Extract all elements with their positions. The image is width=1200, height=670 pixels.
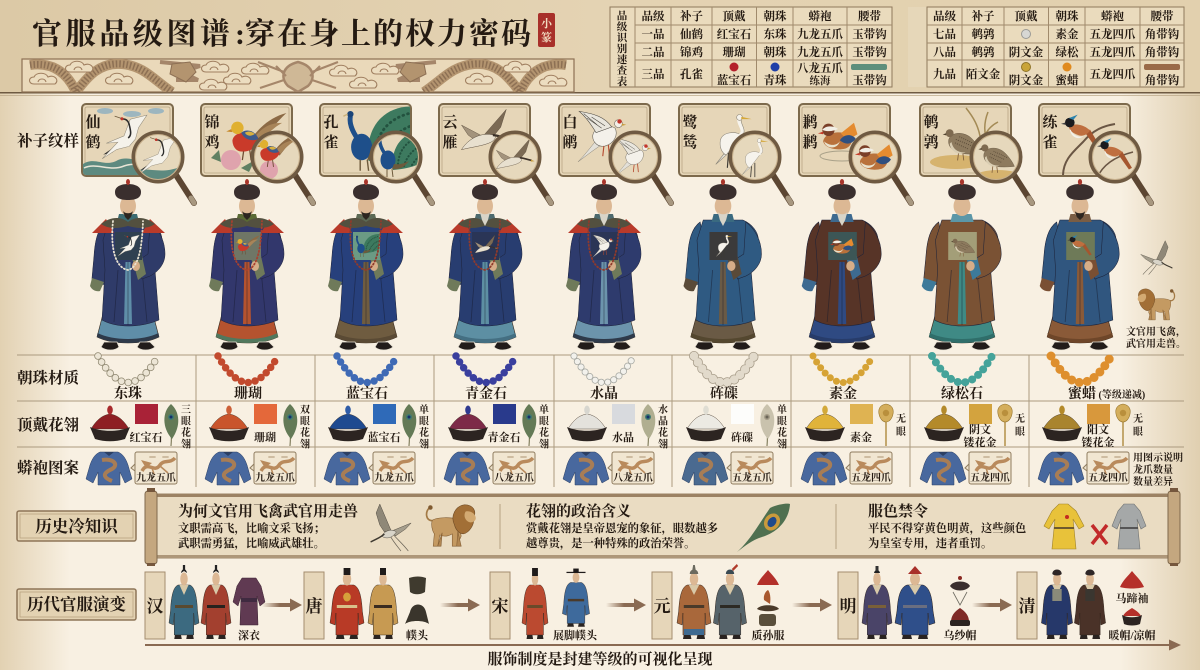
cap set: 珊瑚: 翎: [300, 438, 310, 450]
row heading: 顶戴花翎: 顶戴花翎: [17, 415, 79, 434]
garment: 深衣: 深衣: [238, 628, 260, 642]
note on dragon claws: 龙爪数量: [1133, 463, 1173, 476]
rank badge panel: mandarin duck: 鹣: [802, 133, 818, 151]
rank quick-reference table: ranks 1-3: 珊瑚: [722, 45, 746, 59]
cap set: 素金: 素金: [850, 430, 872, 444]
rank badge panel: wild goose: [439, 104, 530, 176]
rank quick-reference table: ranks 1-3: 速: [617, 53, 628, 66]
silver knob icon: [1022, 30, 1030, 38]
rank quick-reference table: ranks 7-9: 五龙四爪: [1090, 45, 1136, 59]
cap set: 阳文镂花金: 无: [1133, 414, 1143, 425]
rank quick-reference table: ranks 1-3: 蟒袍: [808, 9, 832, 23]
rank quick-reference table: ranks 1-3: 补子: [680, 9, 703, 23]
robe: 五龙四爪 (1): 五龙四爪: [851, 471, 891, 484]
rank quick-reference table: ranks 1-3: 蓝宝石: [717, 73, 752, 87]
cap set: 阳文镂花金: 镂花金: [1082, 435, 1114, 449]
official: rank 2: [209, 179, 284, 350]
rank quick-reference table: ranks 1-3: 玉带钩: [852, 73, 887, 87]
figure: Ming blue: [895, 566, 935, 639]
cap set: 青金石: 单: [539, 405, 549, 416]
rank quick-reference table: ranks 7-9: 绿松: [1056, 45, 1080, 59]
rank badge panel: wild goose: 云: [442, 114, 458, 131]
cap set: 珊瑚: 双: [300, 405, 310, 416]
plaque: 汉: 汉: [146, 597, 164, 616]
rank quick-reference table: ranks 1-3: 品级: [642, 9, 665, 23]
hats: 马蹄袖 and 暖帽/凉帽: 暖帽/凉帽: [1108, 628, 1156, 642]
trivia 2: feather meaning: 花翎的政治含义: [526, 502, 631, 520]
rank badge panel: quail: 鹑: [923, 134, 939, 151]
rank badge panel: silver pheasant: [559, 104, 650, 176]
rank quick-reference table: ranks 7-9: 阴文金: [1009, 73, 1044, 87]
rank quick-reference table: ranks 7-9: 角带钩: [1145, 27, 1180, 41]
robe: 五龙四爪 (1): [801, 452, 892, 485]
beads: 水晶: [574, 356, 634, 402]
timeline: Ming: [838, 566, 1012, 642]
rank quick-reference table: ranks 7-9: 蜜蜡: [1056, 73, 1079, 87]
magnifier: quail: [972, 132, 1032, 203]
plaque: 汉: [145, 572, 165, 639]
cap set: 水晶: [567, 403, 668, 450]
cap set: 珊瑚: 花: [300, 426, 310, 439]
cap set: 阳文镂花金: 眼: [1133, 426, 1143, 438]
cap set: 青金石: 翎: [539, 438, 549, 450]
rank quick-reference table: ranks 1-3: 腰带: [858, 9, 881, 23]
rank badge panel: quail: 鹌: [923, 113, 939, 131]
cap set: 素金: 无: [896, 414, 906, 425]
title: 官服品级图谱: [32, 18, 234, 51]
robe: 九龙五爪 (1): [86, 452, 177, 485]
beads: 蜜蜡: 蜜蜡 (等级递减): [1068, 385, 1145, 402]
cap set: 砗磲: 砗磲: [731, 430, 753, 444]
cap set: 素金: [805, 404, 906, 446]
trivia 1: birds and beasts: 为何文官用飞禽武官用走兽: [178, 502, 358, 520]
horn belt icon: [1144, 64, 1180, 70]
rank badge panel: silver pheasant: 鹇: [562, 134, 578, 151]
robe: 九龙五爪 (2): [205, 452, 296, 485]
rank badge panel: paradise flycatcher: [1039, 104, 1130, 176]
side note: birds and beasts: 武官用走兽。: [1126, 337, 1186, 350]
figure: Song red: [522, 568, 548, 639]
rank quick-reference table: ranks 1-3: 锦鸡: [680, 45, 703, 59]
plaque: 清: 清: [1018, 596, 1036, 616]
seal: 小篆: 小: [541, 17, 553, 30]
rank badge panel: silver pheasant: 白: [562, 113, 578, 131]
rank quick-reference table: ranks 1-3: 表: [617, 75, 628, 88]
arrow: Yuan to Ming: [792, 598, 832, 612]
note on dragon claws: 数量差异: [1133, 475, 1173, 488]
beads: 东珠: 东珠: [114, 385, 142, 402]
rank quick-reference table: ranks 7-9: 五龙四爪: [1090, 67, 1136, 81]
cap set: 水晶: 晶: [658, 414, 668, 428]
arrow: Han to Tang: [262, 598, 302, 612]
trivia 1: birds and beasts: 武职需勇猛，比喻威武雄壮。: [178, 536, 325, 550]
robe: 九龙五爪 (3): 九龙五爪: [374, 471, 414, 484]
hats: 乌纱帽: [944, 576, 976, 642]
cap set: 水晶: 花: [658, 426, 668, 439]
beads: 东珠: [98, 356, 158, 402]
magnifier: golden pheasant: [252, 132, 313, 203]
rank badge panel: peacock: 雀: [323, 133, 339, 151]
label button: 历史冷知识: [17, 511, 136, 541]
plaque: 唐: 唐: [306, 596, 322, 616]
robe: 九龙五爪 (1): 九龙五爪: [136, 471, 176, 484]
rank badge panel: paradise flycatcher: 练: [1042, 113, 1059, 131]
row heading: 蟒袍图案: 蟒袍图案: [17, 458, 80, 477]
cap set: 红宝石: 三: [181, 405, 191, 416]
cap set: 红宝石: 红宝石: [130, 431, 162, 444]
rank badge panel: golden pheasant: 鸡: [204, 134, 220, 151]
cap set: 蓝宝石: 翎: [419, 438, 429, 450]
rank quick-reference table: ranks 1-3: 查: [617, 64, 628, 77]
beads: 砗磲: 砗磲: [710, 385, 738, 402]
right scroll roller: [1168, 488, 1180, 566]
beads: 素金: [813, 356, 873, 402]
side note: birds and beasts: 文官用飞禽，: [1126, 325, 1186, 338]
cap set: 阴文镂花金: 无: [1015, 414, 1025, 425]
cap set: 砗磲: 翎: [777, 438, 787, 450]
hats: 乌纱帽: 乌纱帽: [944, 628, 976, 642]
trivia 3: colour ban: 平民不得穿黄色明黄，这些颜色: [868, 521, 1026, 535]
beads: 蓝宝石: 蓝宝石: [346, 385, 388, 402]
beads: 青金石: 青金石: [465, 385, 507, 402]
plaque: 明: [838, 572, 858, 639]
figure: Qing brown: [1074, 570, 1106, 639]
arrow: Song to Yuan: [606, 598, 646, 612]
beads: 绿松石: 绿松石: [941, 385, 983, 402]
gold knob icon: [1022, 62, 1030, 72]
cap set: 水晶: 水晶: [612, 430, 634, 444]
cap set: 阳文镂花金: [1042, 404, 1143, 449]
rank quick-reference table: ranks 1-3: 仙鹤: [680, 27, 703, 41]
cap set: 蓝宝石: 蓝宝石: [368, 430, 400, 444]
title: :: [235, 18, 249, 51]
cap set: 蓝宝石: [328, 403, 429, 450]
rank quick-reference table: ranks 1-3: 红宝石: [717, 28, 752, 41]
cap set: 砗磲: 眼: [777, 416, 787, 428]
cap set: 水晶: 水: [658, 405, 668, 416]
magnifier: paradise flycatcher: [1090, 132, 1151, 203]
figure: Qing navy: [1041, 570, 1073, 639]
rank quick-reference table: ranks 1-3: 朝珠: [764, 45, 787, 59]
cap set: 青金石: 花: [539, 426, 549, 439]
label button: 历代官服演变: [17, 589, 136, 620]
rank badge panel: crane: 鹤: [85, 133, 101, 151]
robe: 九龙五爪 (3): [324, 452, 415, 485]
magnifier: silver pheasant: [610, 132, 671, 203]
rank quick-reference table: ranks 7-9: 角带钩: [1145, 73, 1180, 87]
cap set: 青金石: 眼: [539, 416, 549, 428]
robe: 九龙五爪 (2): 九龙五爪: [255, 471, 295, 484]
rank quick-reference table: ranks 7-9: [908, 7, 1184, 87]
trivia 2: feather meaning: 赏戴花翎是皇帝恩宠的象征，眼数越多: [526, 521, 718, 535]
rank quick-reference table: ranks 1-3: 九龙五爪: [797, 45, 843, 59]
figure: Tang red: [330, 568, 364, 639]
rank badge panel: peacock: [320, 104, 412, 176]
cap set: 砗磲: 花: [777, 426, 787, 439]
cap set: 阴文镂花金: 镂花金: [964, 435, 996, 449]
rank quick-reference table: ranks 7-9: 腰带: [1150, 9, 1174, 23]
rank quick-reference table: ranks 7-9: 五龙四爪: [1090, 27, 1136, 41]
beads: 砗磲: [694, 356, 754, 402]
cap set: 青金石: 青金石: [488, 430, 520, 444]
cap set: 红宝石: 花: [181, 426, 191, 439]
hats: 幞头: [405, 576, 429, 642]
rank badge panel: golden pheasant: [201, 104, 292, 176]
trivia 1: birds and beasts: 文职需高飞，比喻文采飞扬；: [178, 521, 325, 535]
robe: 八龙五爪 (2): [563, 452, 654, 485]
rank badge panel: egret: 鹭: [682, 113, 698, 131]
rank quick-reference table: ranks 7-9: 朝珠: [1056, 9, 1079, 23]
jade belt icon: [851, 64, 887, 70]
rank quick-reference table: ranks 1-3: 玉带钩: [852, 27, 887, 41]
garment: 深衣: [233, 578, 265, 642]
magnifier: crane: [134, 132, 194, 203]
official: rank 7: [802, 179, 881, 350]
rank quick-reference table: ranks 1-3: 青珠: [764, 73, 787, 87]
timeline: Qing: [1017, 570, 1156, 642]
rank quick-reference table: ranks 1-3: 一品: [642, 28, 665, 41]
cap set: 珊瑚: [209, 404, 310, 450]
rank badge panel: wild goose: 雁: [442, 133, 458, 151]
rank quick-reference table: ranks 7-9: 九品: [933, 67, 956, 81]
official: rank 1: [90, 179, 165, 350]
rank quick-reference table: ranks 1-3: 三品: [642, 68, 665, 81]
ruby knob icon: [730, 62, 738, 72]
magnifier: egret: [730, 132, 791, 203]
figure: Yuan brown: [677, 565, 711, 639]
rank quick-reference table: ranks 1-3: 朝珠: [764, 9, 787, 23]
hats: 幞头: 幞头: [406, 628, 429, 642]
hats: 质孙服: 质孙服: [752, 628, 784, 642]
label: 展脚幞头: 展脚幞头: [553, 628, 598, 642]
cap set: 红宝石: 眼: [181, 416, 191, 428]
rank quick-reference table: ranks 1-3: 孔雀: [680, 67, 703, 81]
rank badge panel: mandarin duck: [799, 104, 890, 176]
beads: 青金石: [456, 356, 516, 402]
robe: 五龙五爪: [682, 452, 773, 485]
trivia 2: feather meaning: 越尊贵，是一种特殊的政治荣誉。: [526, 536, 695, 550]
figure: Han blue: [169, 565, 199, 639]
header band: [0, 0, 1200, 96]
cap set: 青金石: [448, 403, 549, 450]
rank quick-reference table: ranks 7-9: 阴文金: [1009, 45, 1044, 59]
cap set: 素金: 眼: [896, 426, 906, 438]
title: 穿在身上的权力密码: [245, 17, 533, 51]
left scroll roller: [145, 488, 157, 566]
ornament table grid: [17, 355, 1184, 487]
arrow: Tang to Song: [440, 598, 480, 612]
rank quick-reference table: ranks 7-9: 品级: [933, 9, 956, 23]
rank quick-reference table: ranks 7-9: 鹌鹑: [972, 27, 995, 41]
robe: 八龙五爪 (1): 八龙五爪: [494, 471, 534, 484]
cap set: 水晶: 翎: [658, 438, 668, 450]
trivia 1: birds and beasts: [178, 502, 476, 551]
hats: 马蹄袖 and 暖帽/凉帽: 马蹄袖: [1116, 591, 1148, 605]
magnifier: wild goose: [490, 132, 551, 203]
beads: 绿松石: [932, 356, 992, 402]
figure: Ming purple: [862, 566, 892, 639]
rank quick-reference table: ranks 1-3: 九龙五爪: [797, 27, 843, 41]
beads: 水晶: 水晶: [590, 386, 618, 402]
amber knob icon: [1062, 62, 1072, 72]
label button: 历代官服演变: 历代官服演变: [27, 595, 126, 614]
rank quick-reference table: ranks 1-3: 玉带钩: [852, 45, 887, 59]
rank badge panel: peacock: 孔: [323, 114, 339, 131]
figure: Song blue: [562, 569, 590, 627]
plaque: 宋: [490, 572, 510, 639]
rank badge panel: mandarin duck: 鹣: [802, 113, 818, 131]
row heading: 朝珠材质: 朝珠材质: [17, 368, 80, 387]
cap set: 阴文镂花金: 眼: [1015, 426, 1025, 438]
beads: 蓝宝石: [337, 356, 397, 402]
sapphire knob icon: [770, 62, 780, 72]
hats: 马蹄袖 and 暖帽/凉帽: [1108, 571, 1156, 642]
rank quick-reference table: ranks 7-9: 八品: [933, 46, 956, 59]
arrow: Ming to Qing: [972, 598, 1012, 612]
magnifier: peacock: [372, 131, 432, 203]
magnifier: mandarin duck: [850, 132, 911, 203]
timeline: Song: [490, 568, 646, 642]
rank quick-reference table: ranks 1-3: 别: [617, 42, 628, 55]
rank quick-reference table: ranks 1-3: 顶戴: [722, 9, 746, 23]
rank badge panel: crane: [82, 104, 173, 176]
cap set: 阴文镂花金: 阴文: [969, 422, 991, 436]
rank quick-reference table: ranks 7-9: 七品: [933, 28, 956, 41]
official: rank 4: [447, 179, 522, 350]
cap set: 珊瑚: 眼: [300, 416, 310, 428]
robe: 八龙五爪 (1): [444, 452, 535, 485]
row: python robe patterns: [17, 451, 1183, 488]
row: court beads: [17, 356, 1145, 402]
rank quick-reference table: ranks 7-9: 陌文金: [966, 67, 1001, 81]
closing caption: 服饰制度是封建等级的可视化呈现: [487, 650, 713, 668]
official: rank 6: [683, 179, 761, 350]
label button: 历史冷知识: 历史冷知识: [35, 516, 119, 536]
robe: 五龙四爪 (3): 五龙四爪: [1088, 471, 1128, 484]
timeline arrow: [145, 640, 1181, 650]
plaque: 元: [652, 572, 672, 639]
cap set: 砗磲: [686, 403, 787, 450]
note on dragon claws: 用图示说明: [1133, 453, 1183, 464]
plaque: 宋: 宋: [492, 597, 508, 616]
robe: 八龙五爪 (2): 八龙五爪: [613, 471, 653, 484]
rank badge panel: crane: 仙: [85, 114, 101, 131]
rank quick-reference table: ranks 1-3: 东珠: [764, 27, 787, 41]
trivia 3: colour ban: 为皇室专用，违者重罚。: [868, 536, 992, 550]
rank quick-reference table: ranks 7-9: 素金: [1056, 27, 1079, 41]
cap set: 红宝石: 翎: [181, 438, 191, 450]
cap set: 蓝宝石: 单: [419, 405, 429, 416]
beads: 蜜蜡: [1051, 356, 1145, 402]
official: rank 5: [566, 179, 641, 350]
plaque: 唐: [304, 572, 324, 639]
row: hat knobs and feathers: [17, 403, 1143, 450]
timeline: Tang: [304, 568, 480, 642]
trivia 3: colour ban: 服色禁令: [868, 502, 928, 520]
scroll panel: history trivia: [145, 488, 1180, 566]
cap set: 阴文镂花金: [924, 404, 1025, 449]
rank quick-reference table: ranks 1-3: 练海: [810, 74, 831, 87]
dragon ornament band: [22, 59, 574, 92]
beads: 珊瑚: 珊瑚: [234, 385, 262, 402]
rank badge panel: quail: [920, 104, 1011, 176]
row heading: 补子纹样: 补子纹样: [17, 131, 80, 150]
rank badge panel: egret: [679, 104, 770, 176]
robe: 五龙四爪 (3): [1038, 452, 1129, 485]
official: rank 8: [922, 179, 1001, 350]
beads: 珊瑚: [218, 356, 278, 402]
rank quick-reference table: ranks 1-3: 级: [617, 20, 628, 33]
official: rank 3: [328, 179, 403, 350]
rank quick-reference table: ranks 7-9: 顶戴: [1014, 9, 1038, 23]
seal: 小篆: 篆: [541, 30, 552, 44]
rank quick-reference table: ranks 7-9: 补子: [972, 9, 995, 23]
side note: birds and beasts: [1126, 241, 1186, 350]
plaque: 明: 明: [840, 597, 856, 616]
beads: 素金: 素金: [829, 385, 857, 402]
rank quick-reference table: ranks 7-9: 角带钩: [1145, 45, 1180, 59]
rank badge panel: egret: 鸶: [682, 133, 698, 151]
trivia 3: colour ban: [868, 502, 1146, 550]
cap set: 蓝宝石: 花: [419, 426, 429, 439]
rank quick-reference table: ranks 7-9: 鹌鹑: [972, 45, 995, 59]
rank quick-reference table: ranks 1-3: 二品: [642, 46, 665, 59]
hats: 质孙服: [752, 570, 784, 642]
figure: Yuan grey: [713, 565, 747, 639]
rank quick-reference table: ranks 1-3: 品: [617, 11, 627, 22]
timeline: Han: [145, 565, 302, 642]
plaque: 元: 元: [654, 597, 670, 616]
timeline: Yuan: [652, 565, 832, 642]
rank quick-reference table: ranks 1-3: 识: [617, 32, 629, 44]
cap set: 红宝石: [90, 404, 191, 450]
seal: 小篆: [538, 13, 555, 47]
rank quick-reference table: ranks 1-3: 八龙五爪: [797, 61, 843, 75]
figure: Tang yellow: [368, 568, 398, 639]
cap set: 珊瑚: 珊瑚: [254, 430, 276, 444]
robe: 五龙五爪: 五龙五爪: [732, 471, 772, 484]
robe: 五龙四爪 (2): [920, 452, 1011, 485]
cap set: 阳文镂花金: 阳文: [1087, 422, 1109, 436]
rank badge panel: golden pheasant: 锦: [204, 113, 220, 131]
rank badge panel: paradise flycatcher: 雀: [1042, 133, 1058, 151]
figure: Han red: [201, 565, 231, 639]
rank quick-reference table: ranks 1-3: [610, 7, 892, 88]
trivia 2: feather meaning: [526, 502, 790, 552]
rank quick-reference table: ranks 7-9: 蟒袍: [1101, 9, 1124, 23]
cap set: 蓝宝石: 眼: [419, 416, 429, 428]
cap set: 砗磲: 单: [777, 405, 787, 416]
official: rank 9: [1040, 179, 1119, 350]
robe: 五龙四爪 (2): 五龙四爪: [970, 471, 1010, 484]
